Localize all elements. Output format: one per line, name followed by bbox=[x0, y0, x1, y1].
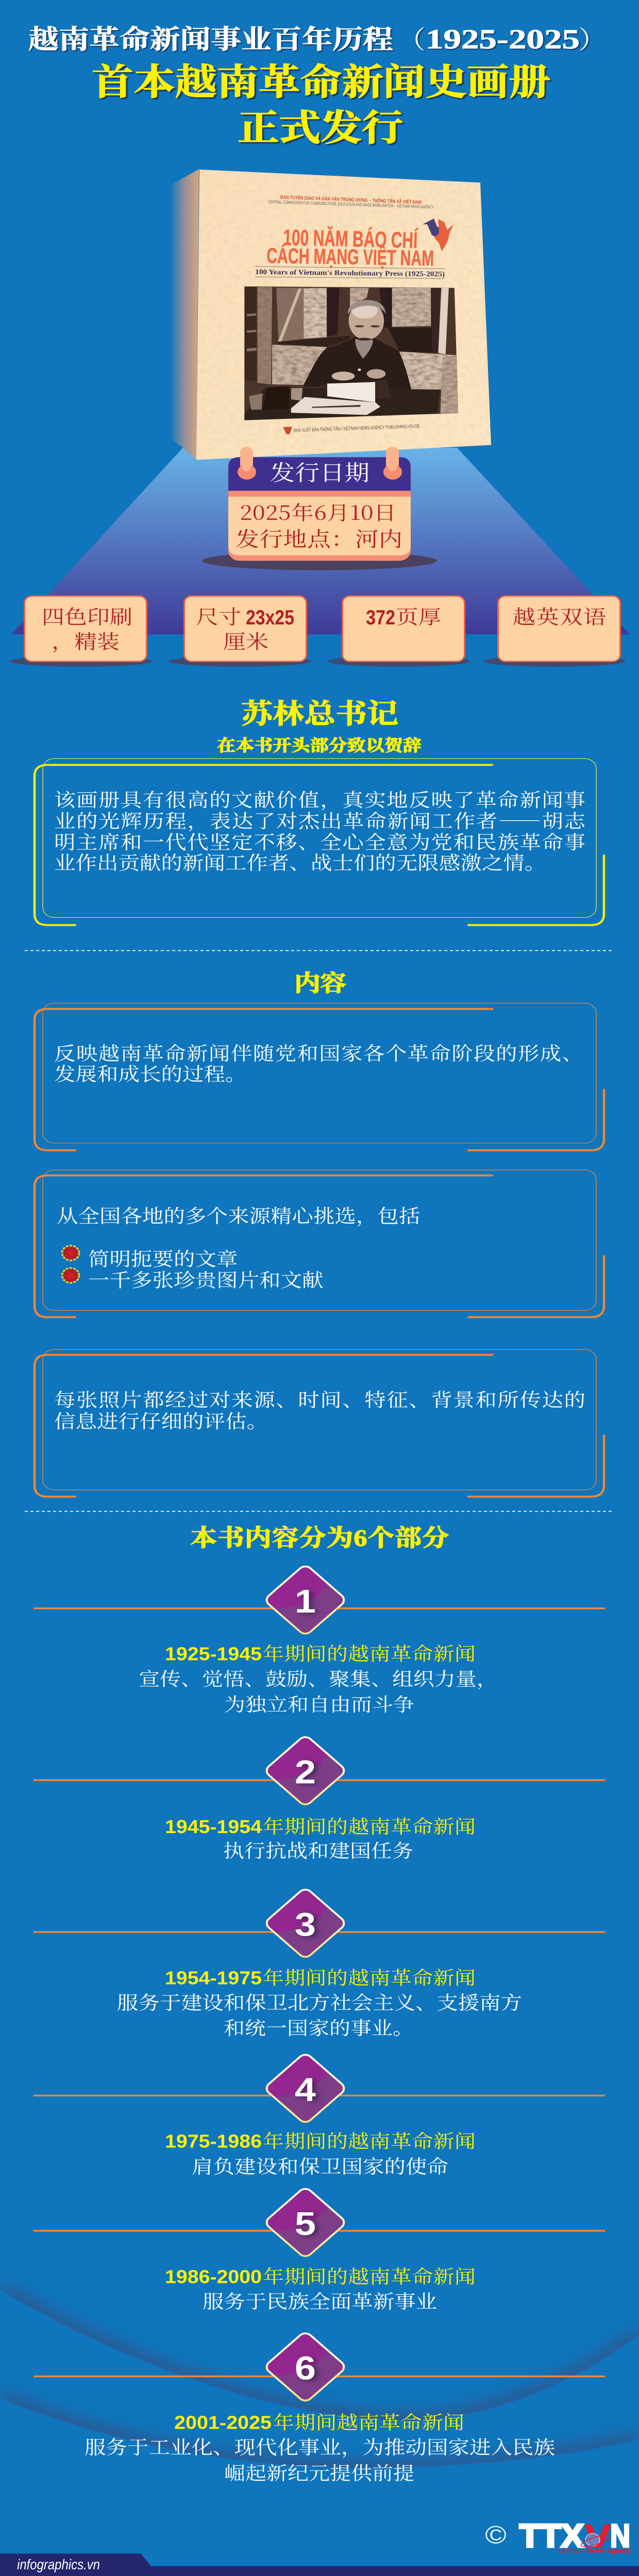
calendar date: 2025年6月10日 bbox=[240, 498, 396, 526]
part 4 period: 1975-1986 bbox=[165, 2131, 262, 2152]
book mockup bbox=[170, 169, 491, 460]
cover emblem bbox=[423, 218, 453, 251]
part 4 badge bbox=[259, 2048, 347, 2125]
content 2 intro: 从全国各地的多个来源精心挑选，包括 bbox=[57, 1201, 420, 1228]
spotlight beam bbox=[11, 448, 630, 634]
content 1 text bbox=[54, 1039, 583, 1087]
content 3 text: 每张照片都经过对来源、时间、特征、背景和所传达的 bbox=[54, 1385, 585, 1412]
title: subtitle line: ） bbox=[578, 20, 607, 56]
bullet text 2: 一千多张珍贵图片和文献 bbox=[88, 1266, 324, 1293]
cover publisher footer bbox=[283, 423, 420, 434]
part 3 badge bbox=[259, 1883, 347, 1959]
copyright mark: C bbox=[490, 2526, 502, 2544]
title: subtitle line: 1925-2025 bbox=[426, 24, 580, 55]
part 4 description: 肩负建设和保卫国家的使命 bbox=[192, 2152, 448, 2179]
part 2 description: 执行抗战和建国任务 bbox=[223, 1836, 413, 1862]
part 6 description bbox=[85, 2433, 555, 2485]
wordmark: TTX bbox=[519, 2518, 584, 2554]
calendar heading: 发行日期 bbox=[270, 455, 369, 487]
part 3 period bbox=[165, 1963, 476, 1990]
part 1 period: 1925-1945 bbox=[165, 1643, 262, 1665]
part 3 description bbox=[117, 1988, 522, 2040]
spec card: pages bbox=[328, 596, 470, 667]
spec card: size: 厘米 bbox=[223, 626, 268, 654]
part 5 period bbox=[165, 2262, 476, 2289]
part 1 description: 宣传、觉悟、鼓励、聚集、组织力量， bbox=[139, 1665, 498, 1691]
spec card: size: 尺寸 bbox=[196, 602, 241, 630]
part 5 period: 年期间的越南革命新闻 bbox=[263, 2262, 476, 2289]
message text: 业的光辉历程，表达了对杰出革命新闻工作者——胡志 bbox=[54, 807, 586, 834]
calendar ring right bbox=[383, 447, 402, 480]
panel: content 3 bbox=[35, 1349, 604, 1497]
wordmark: N bbox=[610, 2518, 630, 2554]
logo: copyright TTXVN bbox=[486, 2518, 631, 2555]
wordmark: V bbox=[585, 2519, 611, 2554]
wordmark bbox=[519, 2518, 630, 2554]
cover title: 100 NĂM BÁO CHÍ bbox=[283, 225, 418, 253]
part 4 bbox=[33, 2048, 605, 2179]
bullet icon 1 bbox=[62, 1246, 79, 1260]
copyright mark bbox=[486, 2526, 505, 2544]
message text bbox=[54, 786, 586, 875]
part 4 badge: 4 bbox=[295, 2071, 316, 2108]
panel: content 2 bbox=[35, 1170, 604, 1317]
calendar: release date bbox=[228, 447, 411, 561]
part 5 description: 服务于民族全面革新事业 bbox=[203, 2287, 437, 2314]
part 1 badge: 1 bbox=[295, 1582, 316, 1620]
part 2 bbox=[33, 1731, 605, 1862]
part 3 period: 1954-1975 bbox=[165, 1968, 262, 1989]
part 4 period: 年期间的越南革命新闻 bbox=[263, 2127, 476, 2153]
part 2 period: 1945-1954 bbox=[165, 1816, 262, 1837]
part 2 badge bbox=[259, 1731, 347, 1807]
title: subtitle line: 越南革命新闻事业百年历程 bbox=[28, 18, 393, 56]
heading: content: 内容 bbox=[294, 964, 346, 998]
spec card: pages: 页厚 bbox=[396, 602, 441, 630]
cover publisher footer: NHÀ XUẤT BẢN THÔNG TẤN / VIETNAM NEWS AGENCY PUBLISHING HOUSE bbox=[294, 423, 420, 433]
spec card: printing: 四色印刷 bbox=[42, 602, 132, 630]
part 3 badge: 3 bbox=[295, 1906, 316, 1943]
part 5 badge: 5 bbox=[295, 2205, 316, 2242]
title: subtitle line bbox=[28, 18, 607, 56]
part 1 description bbox=[139, 1665, 498, 1716]
cover publisher lines: BAN TUYÊN GIÁO VÀ DÂN VẬN TRUNG ƯƠNG – THÔNG TẤN XÃ VIỆT NAM bbox=[280, 194, 422, 206]
content 3 text bbox=[54, 1385, 585, 1434]
calendar place: 发行地点：河内 bbox=[236, 523, 402, 553]
content 3 text: 信息进行仔细的评估。 bbox=[54, 1407, 268, 1434]
message text: 明主席和一代代坚定不移、全心全意为党和民族革命事 bbox=[54, 828, 585, 855]
title: subtitle line: （ bbox=[397, 20, 426, 56]
heading: six parts: 本书内容分为6个部分 bbox=[190, 1526, 449, 1551]
heading: general secretary: 苏林总书记 bbox=[241, 692, 398, 731]
subheading: congratulations: 在本书开头部分致以贺辞 bbox=[217, 732, 422, 756]
spec card: languages: 越英双语 bbox=[513, 602, 606, 630]
panel: content 1 bbox=[35, 1003, 604, 1150]
cover publisher lines bbox=[268, 194, 434, 210]
spec card: pages: 372 bbox=[366, 606, 395, 629]
part 6 bbox=[33, 2327, 605, 2485]
spec card: printing bbox=[10, 596, 152, 667]
title: main heading bbox=[92, 53, 550, 151]
heading: general secretary bbox=[217, 692, 422, 756]
message text: 该画册具有很高的文献价值，真实地反映了革命新闻事 bbox=[54, 786, 585, 812]
part 2 period: 年期间的越南革命新闻 bbox=[263, 1812, 476, 1838]
part 4 period bbox=[165, 2127, 476, 2153]
cover title: CÁCH MẠNG VIỆT NAM bbox=[266, 243, 434, 270]
spec card: printing: ，精装 bbox=[52, 626, 120, 654]
part 1 period bbox=[165, 1639, 476, 1666]
calendar shadow bbox=[202, 551, 437, 570]
footer bar bbox=[0, 2553, 639, 2576]
spec card: size: 23x25 bbox=[246, 606, 294, 629]
bullet icon 2 bbox=[62, 1268, 79, 1283]
part 5 period: 1986-2000 bbox=[165, 2266, 262, 2287]
part 2 badge: 2 bbox=[295, 1753, 316, 1790]
calendar ring left bbox=[238, 447, 256, 480]
cover title bbox=[266, 225, 434, 270]
spec card: size bbox=[169, 596, 311, 667]
part 2 period bbox=[165, 1812, 476, 1838]
globe bbox=[580, 2533, 611, 2549]
part 1 description: 为独立和自由而斗争 bbox=[224, 1690, 414, 1716]
content 1 text: 发展和成长的过程。 bbox=[54, 1060, 246, 1087]
part 5 badge bbox=[259, 2182, 347, 2259]
footer site name: infographics.vn bbox=[17, 2557, 100, 2572]
part 3 description: 服务于建设和保卫北方社会主义、支援南方 bbox=[117, 1988, 522, 2015]
book cover bbox=[196, 170, 491, 460]
part 6 badge: 6 bbox=[295, 2349, 316, 2387]
content 1 text: 反映越南革命新闻伴随党和国家各个革命阶段的形成、 bbox=[54, 1039, 583, 1066]
cover publisher lines: CENTRAL COMMISSION FOR COMMUNICATION, EDUCATION AND MASS MOBILISATION – VIETNAM NEWS AGENCY bbox=[268, 199, 434, 210]
title: main heading: 正式发行 bbox=[238, 99, 403, 151]
part 5 bbox=[33, 2182, 605, 2314]
part 3 description: 和统一国家的事业。 bbox=[224, 2013, 414, 2040]
part 6 description: 服务于工业化、现代化事业，为推动国家进入民族 bbox=[85, 2433, 555, 2460]
panel: message bbox=[35, 758, 604, 925]
spec card: languages bbox=[483, 596, 626, 667]
cover english subtitle: 100 Years of Vietnam's Revolutionary Press (1925-2025) bbox=[255, 268, 445, 278]
part 6 badge bbox=[259, 2327, 347, 2403]
part 6 period: 年期间越南革命新闻 bbox=[273, 2408, 464, 2434]
message text: 业作出贡献的新闻工作者、战士们的无限感激之情。 bbox=[54, 849, 546, 875]
part 6 period: 2001-2025 bbox=[174, 2412, 272, 2433]
part 3 period: 年期间的越南革命新闻 bbox=[263, 1963, 476, 1990]
part 6 period bbox=[174, 2408, 464, 2434]
part 1 badge bbox=[259, 1560, 347, 1636]
book spine bbox=[170, 169, 199, 460]
bullet text 1: 简明扼要的文章 bbox=[88, 1245, 238, 1272]
part 3 bbox=[33, 1883, 605, 2040]
part 6 description: 崛起新纪元提供前提 bbox=[224, 2459, 414, 2485]
title: main heading: 首本越南革命新闻史画册 bbox=[92, 53, 550, 105]
part 1 bbox=[33, 1560, 605, 1716]
part 1 period: 年期间的越南革命新闻 bbox=[263, 1639, 476, 1666]
cover photo bbox=[244, 286, 458, 420]
